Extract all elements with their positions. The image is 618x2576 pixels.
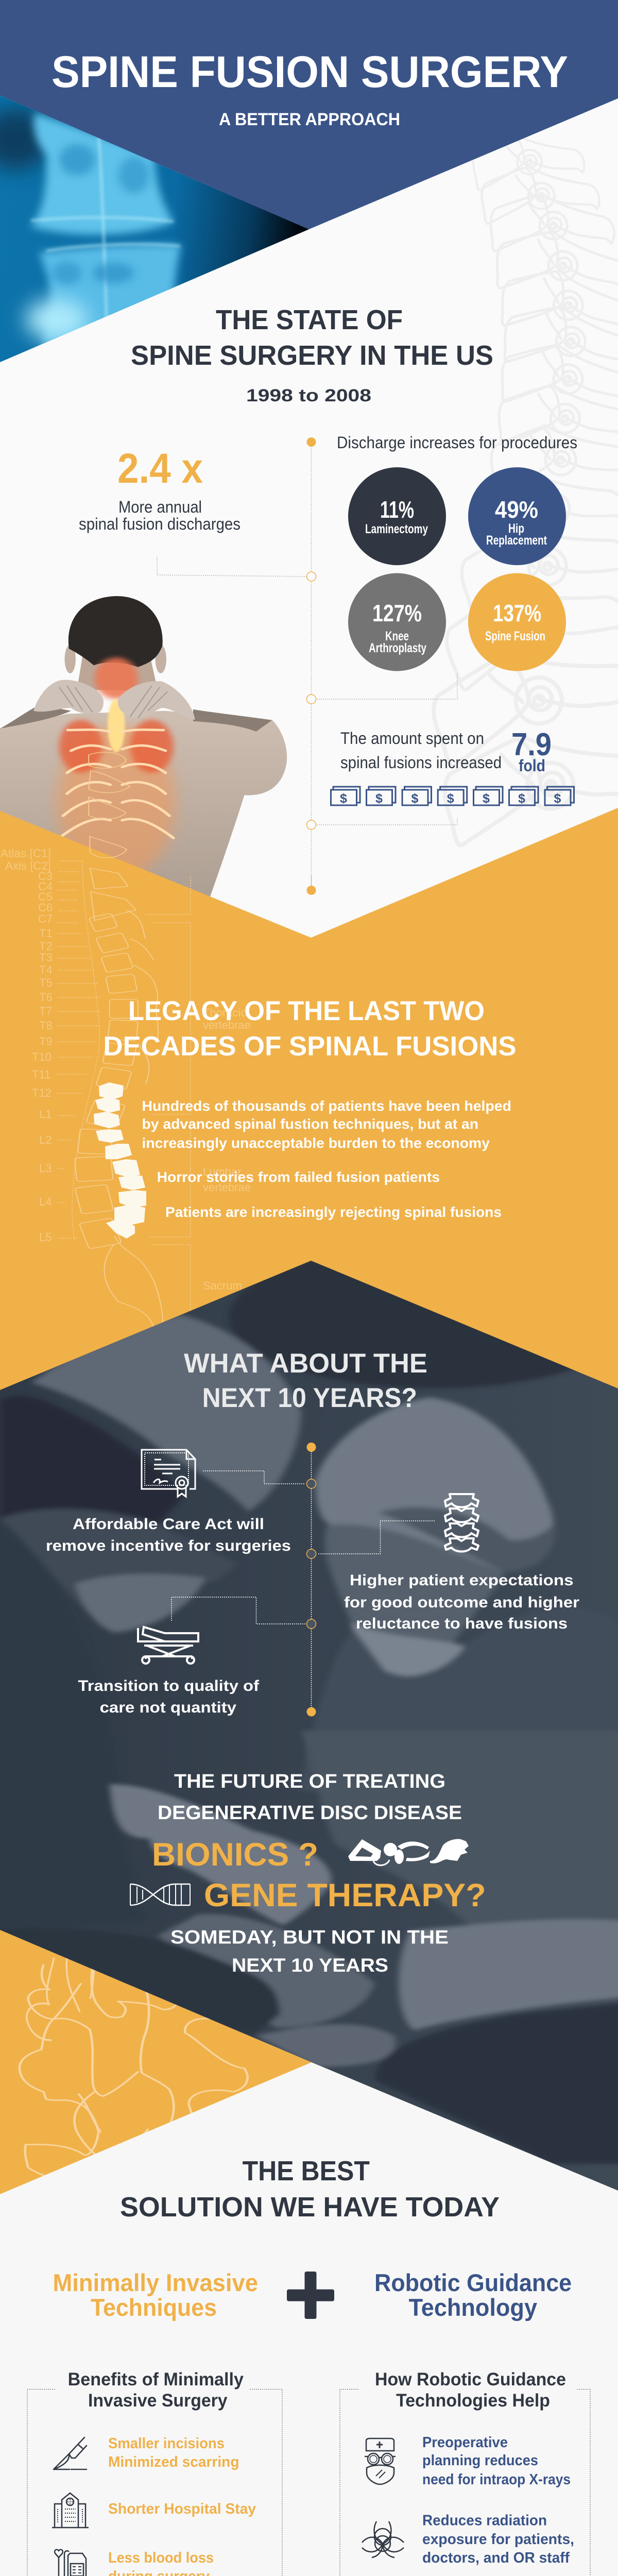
circle: spine fusion: 137% <box>493 600 541 626</box>
circle: hip replacement: Replacement <box>486 533 547 548</box>
icons: money row: $ <box>411 791 419 806</box>
icon: stretcher <box>138 1627 198 1664</box>
heading: robotic guidance technology <box>374 2269 572 2321</box>
anatomical spine diagram: T12 <box>32 1087 52 1099</box>
icon: surgeon <box>365 2438 396 2484</box>
text: transition to quality: care not quantity <box>100 1699 236 1716</box>
anatomical spine diagram: Atlas [C1] <box>1 847 51 860</box>
panel heading: How Robotic Guidance <box>375 2369 566 2389</box>
date range: 1998 to 2008 <box>246 386 371 405</box>
anatomical spine diagram: vertebrae <box>203 1019 251 1031</box>
text: preoperative planning: need for intraop X-rays <box>422 2471 571 2488</box>
title: SPINE FUSION SURGERY <box>52 47 568 97</box>
section title <box>184 1348 427 1413</box>
section title <box>131 304 493 371</box>
stat: 2.4x <box>79 445 241 533</box>
icons: money row: $ <box>447 791 454 806</box>
anatomical spine diagram: C5 <box>38 890 53 903</box>
text: preoperative planning <box>422 2434 571 2488</box>
anatomical spine diagram: C7 <box>38 912 53 925</box>
orange triangle with spine outline <box>0 1930 312 2197</box>
text: transition to quality <box>78 1677 260 1716</box>
faint spine outline, right side <box>428 133 618 846</box>
icons: money row <box>331 787 574 806</box>
x-ray image <box>0 95 309 363</box>
anatomical spine diagram: T9 <box>39 1035 53 1048</box>
stat: amount spent: fold <box>519 756 545 775</box>
illustration: man with glowing spine <box>0 596 287 900</box>
anatomical spine diagram: T4 <box>39 963 53 976</box>
orange background <box>0 808 618 1391</box>
anatomical spine diagram: Lumbar <box>203 1165 242 1178</box>
heading: minimally invasive techniques: Techniques <box>91 2294 217 2321</box>
anatomical spine diagram: T7 <box>39 1005 53 1018</box>
section title: SOLUTION WE HAVE TODAY <box>120 2192 500 2223</box>
section title <box>120 2156 500 2223</box>
section title: SPINE SURGERY IN THE US <box>131 340 493 371</box>
someday text: SOMEDAY, BUT NOT IN THE <box>170 1927 449 1947</box>
text: higher patient expectations: reluctance to have fusions <box>356 1615 568 1632</box>
legacy statements: Horror stories from failed fusion patients <box>157 1169 440 1185</box>
text: affordable care act <box>46 1516 291 1554</box>
icon: hospital <box>52 2493 89 2528</box>
anatomical spine diagram: Thoracic <box>203 1006 246 1019</box>
panel: legacy of spinal fusions <box>0 752 618 1391</box>
icon: vertebrae stack <box>445 1494 478 1552</box>
circle: spine fusion <box>468 573 566 671</box>
text: higher patient expectations: Higher patient expectations <box>350 1572 574 1589</box>
anatomical spine diagram: L5 <box>39 1231 52 1244</box>
header background <box>0 0 618 229</box>
anatomical spine diagram: vertebrae <box>203 1181 251 1194</box>
text: less blood loss: Less blood loss <box>108 2550 214 2566</box>
text: smaller incisions <box>108 2435 239 2470</box>
panel: benefits of minimally invasive surgery <box>27 2369 282 2576</box>
panel heading <box>375 2369 566 2411</box>
text: affordable care act: remove incentive for surgeries <box>46 1537 291 1554</box>
anatomical spine diagram: L1 <box>39 1108 52 1121</box>
text: preoperative planning: Preoperative <box>422 2434 508 2451</box>
subtitle: A BETTER APPROACH <box>219 110 400 129</box>
anatomical spine diagram: Sacrum <box>203 1279 242 1292</box>
highlighted vertebrae <box>94 1082 146 1239</box>
stat: 2.4x: spinal fusion discharges <box>79 515 241 533</box>
circle: knee arthroplasty: 127% <box>372 600 422 626</box>
text: reduces radiation <box>422 2512 574 2566</box>
surgeon photo background <box>0 1247 618 2200</box>
panel heading: Invasive Surgery <box>88 2391 228 2411</box>
circle: knee arthroplasty <box>348 573 446 671</box>
legacy statements: by advanced spinal fustion techniques, but at an <box>142 1116 478 1132</box>
panel: the best solution <box>0 2062 618 2576</box>
anatomical spine diagram: T5 <box>39 976 53 989</box>
anatomical spine diagram: L3 <box>39 1162 52 1175</box>
heading: minimally invasive techniques <box>53 2269 258 2321</box>
text: preoperative planning: planning reduces <box>422 2452 538 2469</box>
light background <box>0 2062 618 2576</box>
someday text: NEXT 10 YEARS <box>232 1955 388 1976</box>
panel heading: Technologies Help <box>396 2391 550 2411</box>
text: transition to quality: Transition to quality of <box>78 1677 260 1694</box>
stat: amount spent: The amount spent on <box>340 729 484 748</box>
section title <box>103 996 516 1061</box>
text: affordable care act: Affordable Care Act will <box>73 1516 264 1533</box>
icon: plus <box>287 2272 334 2319</box>
discharge heading: Discharge increases for procedures <box>337 433 577 452</box>
someday text <box>170 1927 449 1976</box>
text: higher patient expectations <box>344 1572 579 1632</box>
timeline <box>171 1443 435 1717</box>
section title: NEXT 10 YEARS? <box>202 1383 417 1413</box>
icon: bionic limb <box>348 1839 469 1865</box>
text: reduces radiation: Reduces radiation <box>422 2512 547 2529</box>
anatomical spine diagram: T11 <box>32 1068 50 1081</box>
circle: hip replacement <box>468 467 566 565</box>
timeline <box>157 437 457 890</box>
circle: hip replacement: 49% <box>495 496 538 523</box>
stat: amount spent: 7.9 <box>511 727 552 762</box>
panel: the state of spine surgery <box>0 133 618 900</box>
timeline end dot <box>307 876 316 895</box>
icons: money row: $ <box>375 791 383 806</box>
bionics question: BIONICS ? <box>152 1837 318 1873</box>
heading: future of treating: THE FUTURE OF TREATING <box>174 1771 445 1792</box>
circle: knee arthroplasty: Knee <box>385 629 409 643</box>
circle: laminectomy: 11% <box>380 496 414 523</box>
circle: laminectomy <box>348 467 446 565</box>
icons: money row: $ <box>340 791 347 806</box>
circle: spine fusion: Spine Fusion <box>485 629 545 643</box>
panel heading: Benefits of Minimally <box>68 2369 244 2389</box>
panel heading <box>68 2369 244 2411</box>
panel: how robotic guidance helps <box>340 2369 590 2576</box>
text: reduces radiation: exposure for patients, <box>422 2531 574 2548</box>
text: shorter hospital stay: Shorter Hospital Stay <box>108 2501 256 2517</box>
anatomical spine diagram: C3 <box>38 870 53 883</box>
gene therapy question: GENE THERAPY? <box>204 1877 486 1913</box>
anatomical spine diagram: C4 <box>38 880 53 893</box>
legacy statements: increasingly unacceptable burden to the economy <box>142 1135 490 1151</box>
anatomical spine diagram: T6 <box>39 991 53 1004</box>
heading: robotic guidance technology: Technology <box>409 2294 537 2321</box>
text: smaller incisions: Minimized scarring <box>108 2454 239 2470</box>
text: less blood loss <box>108 2550 214 2576</box>
anatomical spine diagram: T8 <box>39 1019 53 1032</box>
section title: DECADES OF SPINAL FUSIONS <box>103 1031 516 1061</box>
icons: money row: $ <box>483 791 490 806</box>
legacy statements: Hundreds of thousands of patients have been helped <box>142 1098 511 1114</box>
heading: minimally invasive techniques: Minimally Invasive <box>53 2269 258 2296</box>
legacy statements: Patients are increasingly rejecting spinal fusions <box>165 1204 502 1220</box>
stat: amount spent <box>340 727 552 775</box>
icon: certificate <box>142 1450 195 1497</box>
circle: laminectomy: Laminectomy <box>365 522 428 536</box>
text: smaller incisions: Smaller incisions <box>108 2435 225 2452</box>
anatomical spine diagram: L2 <box>39 1133 52 1146</box>
anatomical spine diagram: T10 <box>32 1050 52 1063</box>
icon: dna <box>130 1884 190 1905</box>
heading: future of treating <box>158 1771 462 1824</box>
legacy statements <box>142 1098 511 1220</box>
anatomical spine diagram: C6 <box>38 901 53 914</box>
section title: THE BEST <box>243 2156 370 2187</box>
heading: future of treating: DEGENERATIVE DISC DISEASE <box>158 1802 462 1824</box>
circle: hip replacement: Hip <box>508 521 524 536</box>
panel: what about the next 10 years <box>0 1247 618 2200</box>
icons: money row: $ <box>554 791 561 806</box>
anatomical spine diagram: T3 <box>39 951 53 964</box>
anatomical spine diagram: T1 <box>39 927 53 940</box>
stat: 2.4x: More annual <box>118 498 202 516</box>
anatomical spine diagram: T2 <box>39 940 53 953</box>
stat: amount spent: spinal fusions increased <box>340 753 502 772</box>
section title: THE STATE OF <box>216 304 403 335</box>
anatomical spine diagram: L4 <box>39 1195 52 1208</box>
text: reduces radiation: doctors, and OR staff <box>422 2550 570 2566</box>
icons: money row: $ <box>518 791 525 806</box>
section title: WHAT ABOUT THE <box>184 1348 427 1379</box>
circle: knee arthroplasty: Arthroplasty <box>369 641 426 655</box>
icon: scalpel <box>54 2437 87 2469</box>
section title: LEGACY OF THE LAST TWO <box>128 996 485 1026</box>
panel: header <box>0 0 618 363</box>
icon: biohazard <box>362 2521 404 2557</box>
heading: robotic guidance technology: Robotic Guidance <box>374 2269 572 2296</box>
icon: blood bag <box>55 2550 86 2576</box>
text: higher patient expectations: for good outcome and higher <box>344 1594 579 1611</box>
anatomical spine diagram: Axis [C2] <box>5 859 51 872</box>
anatomical spine diagram <box>1 752 251 1375</box>
stat: 2.4x: 2.4 x <box>117 445 203 492</box>
